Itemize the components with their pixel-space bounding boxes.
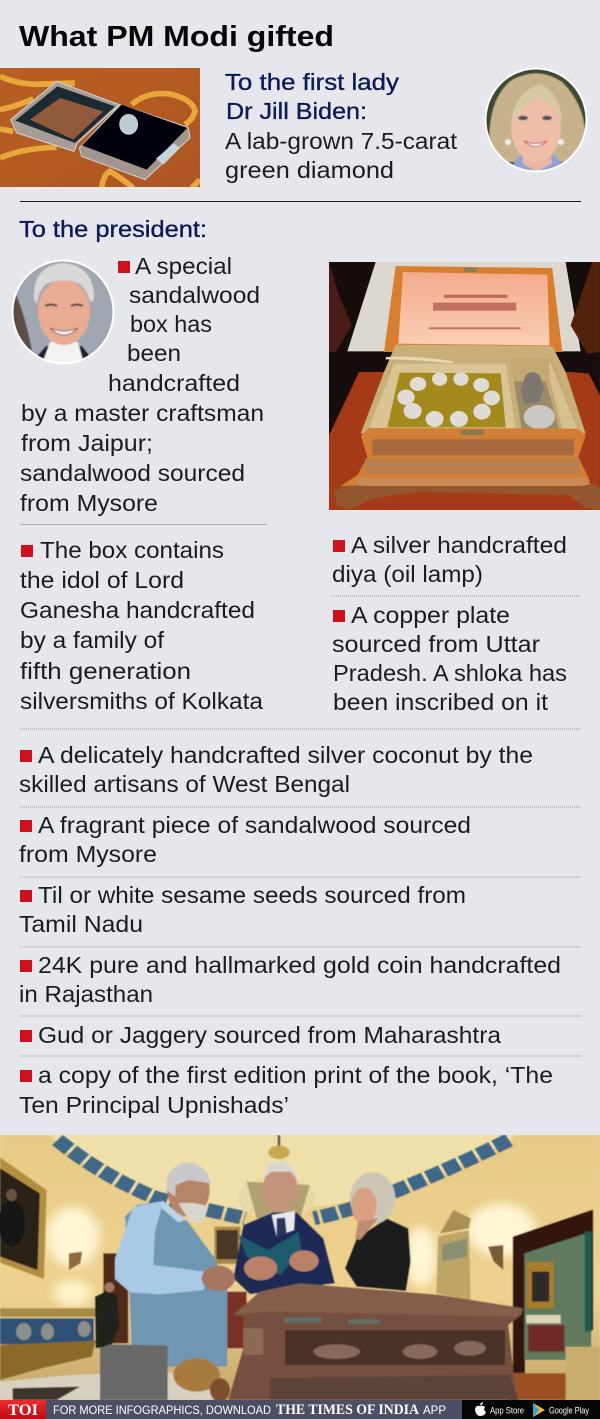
divider bbox=[20, 524, 267, 526]
bullet bbox=[333, 610, 345, 622]
text: Ganesha idol: Ganesha handcrafted bbox=[20, 597, 255, 623]
text: silver coconut: A delicately handcrafted silver coconut by the bbox=[38, 742, 533, 768]
text: Ganesha idol: silversmiths of Kolkata bbox=[20, 688, 263, 714]
text: first lady gift bbox=[225, 69, 458, 183]
text: copper plate: Pradesh. A shloka has bbox=[333, 660, 567, 686]
TOI logo: TOI bbox=[8, 1402, 38, 1419]
text: copper plate: been inscribed on it bbox=[333, 689, 549, 715]
text: first lady gift: A lab-grown 7.5-carat bbox=[225, 128, 458, 154]
text: sandalwood box: by a master craftsman bbox=[21, 400, 264, 426]
text: sesame seeds: Tamil Nadu bbox=[19, 911, 143, 937]
drapes bbox=[57, 1140, 245, 1218]
text: sandalwood box: sandalwood bbox=[129, 282, 260, 308]
bullet bbox=[21, 545, 33, 557]
bullet bbox=[20, 1030, 32, 1042]
heading: to the president: To the president: bbox=[19, 216, 207, 242]
silver tins bbox=[397, 372, 500, 427]
photo: green diamond in case bbox=[0, 68, 200, 188]
text: first lady gift: green diamond bbox=[225, 157, 394, 183]
Ganesha idol bbox=[521, 372, 544, 404]
icon: play triangle bbox=[533, 1403, 545, 1417]
text: gold coin: in Rajasthan bbox=[19, 981, 153, 1007]
title: What PM Modi gifted bbox=[19, 21, 334, 53]
diya bbox=[524, 405, 555, 429]
text: Ganesha idol: The box contains bbox=[40, 537, 224, 563]
text: book: Ten Principal Upnishads’ bbox=[19, 1092, 289, 1118]
app store badges bbox=[462, 1400, 600, 1419]
text: silver coconut: skilled artisans of West Bengal bbox=[19, 771, 350, 797]
text: sandalwood piece: from Mysore bbox=[19, 841, 157, 867]
bullet bbox=[20, 1070, 32, 1082]
feet bbox=[334, 484, 600, 510]
footer message: APP bbox=[423, 1405, 446, 1417]
bullet bbox=[118, 261, 130, 273]
bullet bbox=[333, 540, 345, 552]
text: sandalwood box: handcrafted bbox=[108, 370, 240, 396]
photo: Modi and the Bidens at the White House bbox=[0, 1135, 600, 1402]
text: Ganesha idol: by a family of bbox=[20, 627, 165, 653]
text: silver coconut bbox=[19, 742, 533, 797]
text: silver diya bbox=[332, 532, 567, 587]
footer message bbox=[53, 1402, 446, 1418]
text: sesame seeds: Til or white sesame seeds sourced from bbox=[38, 882, 466, 908]
right mirror bbox=[436, 1230, 471, 1300]
Modi figure bbox=[115, 1162, 235, 1367]
TOI logo bbox=[0, 1400, 46, 1419]
text: sesame seeds bbox=[19, 882, 466, 937]
text: sandalwood box: been bbox=[127, 340, 181, 366]
bullet bbox=[20, 750, 32, 762]
text: sandalwood piece bbox=[19, 812, 471, 867]
text: gold coin: 24K pure and hallmarked gold coin handcrafted bbox=[38, 952, 561, 978]
text: sandalwood box: box has bbox=[130, 311, 212, 337]
bullet bbox=[20, 960, 32, 972]
text: sandalwood box: sandalwood sourced bbox=[20, 460, 245, 486]
bullet bbox=[20, 890, 32, 902]
chandelier bbox=[246, 1135, 311, 1220]
text: copper plate bbox=[332, 602, 567, 715]
text: sandalwood box: A special bbox=[135, 253, 232, 279]
portrait: Dr Jill Biden bbox=[484, 68, 588, 172]
lid bbox=[384, 266, 562, 352]
text: sandalwood piece: A fragrant piece of sandalwood sourced bbox=[38, 812, 471, 838]
icon: apple bbox=[475, 1402, 486, 1416]
text: Ganesha idol bbox=[20, 537, 263, 714]
text: book: a copy of the first edition print of the book, ‘The bbox=[38, 1062, 553, 1088]
text: sandalwood box bbox=[20, 253, 264, 516]
bullet bbox=[20, 820, 32, 832]
rear painting bbox=[214, 1227, 240, 1264]
left painting bbox=[0, 1157, 47, 1279]
guard bbox=[95, 1292, 119, 1348]
back door bbox=[103, 1253, 128, 1343]
text: copper plate: sourced from Uttar bbox=[332, 631, 540, 657]
box front bbox=[341, 428, 591, 486]
text: copper plate: A copper plate bbox=[351, 602, 510, 628]
footer message: THE TIMES OF INDIA bbox=[276, 1402, 419, 1418]
photo: open sandalwood box bbox=[329, 262, 600, 510]
footer bar bbox=[0, 1400, 600, 1419]
text: sandalwood box: from Mysore bbox=[20, 490, 158, 516]
felt liner bbox=[361, 345, 586, 434]
sconces bbox=[69, 1252, 82, 1270]
app store badges: Google Play bbox=[549, 1406, 589, 1416]
text: Ganesha idol: fifth generation bbox=[20, 658, 191, 684]
text: first lady gift: Dr Jill Biden: bbox=[226, 98, 367, 124]
sofa bbox=[0, 1308, 96, 1317]
text: gold coin bbox=[19, 952, 561, 1007]
doorway bbox=[513, 1209, 593, 1373]
text: sandalwood box: from Jaipur; bbox=[21, 430, 153, 456]
text: silver diya: A silver handcrafted bbox=[351, 532, 567, 558]
footer message: FOR MORE INFOGRAPHICS, DOWNLOAD bbox=[53, 1405, 271, 1417]
carved wooden chest bbox=[228, 1283, 523, 1402]
text: first lady gift: To the first lady bbox=[225, 69, 399, 95]
Joe Biden figure bbox=[233, 1162, 335, 1294]
text: Ganesha idol: the idol of Lord bbox=[20, 567, 184, 593]
divider bbox=[20, 200, 581, 202]
foreground table and gifts bbox=[0, 1344, 230, 1402]
app store badges: App Store bbox=[490, 1406, 524, 1416]
text: jaggery: Gud or Jaggery sourced from Maharashtra bbox=[38, 1022, 501, 1048]
Jill Biden figure bbox=[345, 1172, 411, 1291]
portrait: President Biden bbox=[12, 260, 114, 364]
text: book bbox=[19, 1062, 553, 1118]
text: silver diya: diya (oil lamp) bbox=[332, 561, 483, 587]
